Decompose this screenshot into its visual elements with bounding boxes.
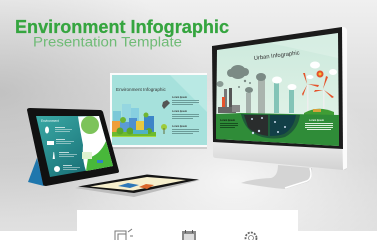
smoke columns xyxy=(227,65,296,114)
ground text left: Lorem Ipsum xyxy=(220,119,235,122)
tablet: lying flat xyxy=(75,174,200,197)
slide: environment infographic xyxy=(110,73,207,149)
stand xyxy=(241,165,312,189)
ground text right: Lorem Ipsum xyxy=(309,119,324,122)
monitor heading: Urban Infographic xyxy=(254,50,300,62)
wind turbines xyxy=(302,62,337,116)
tablet list xyxy=(45,126,80,172)
subtitle: Presentation Template xyxy=(33,34,182,50)
chin xyxy=(213,140,347,170)
slide heading: Environment Infographic xyxy=(116,87,166,92)
icon: layout xyxy=(115,229,133,240)
white feature panel xyxy=(77,210,298,240)
text block with icons xyxy=(161,96,199,134)
icon: gear xyxy=(246,232,256,240)
factory xyxy=(216,81,240,113)
text block with icons: Lorem Ipsum xyxy=(172,96,187,99)
blue stand xyxy=(28,158,44,186)
screen xyxy=(216,33,339,146)
desktop monitor xyxy=(212,27,347,189)
green ground and cutaway xyxy=(216,113,339,146)
tablet heading: Environment xyxy=(41,119,59,123)
bezel xyxy=(212,27,343,149)
icon: calendar xyxy=(182,230,196,240)
text block with icons: Lorem Ipsum xyxy=(172,125,187,128)
title: Environment Infographic xyxy=(15,17,229,37)
tablet: upright xyxy=(27,108,119,186)
city illustration xyxy=(112,104,156,137)
text block with icons: Lorem Ipsum xyxy=(172,110,187,113)
white frame xyxy=(340,27,347,170)
